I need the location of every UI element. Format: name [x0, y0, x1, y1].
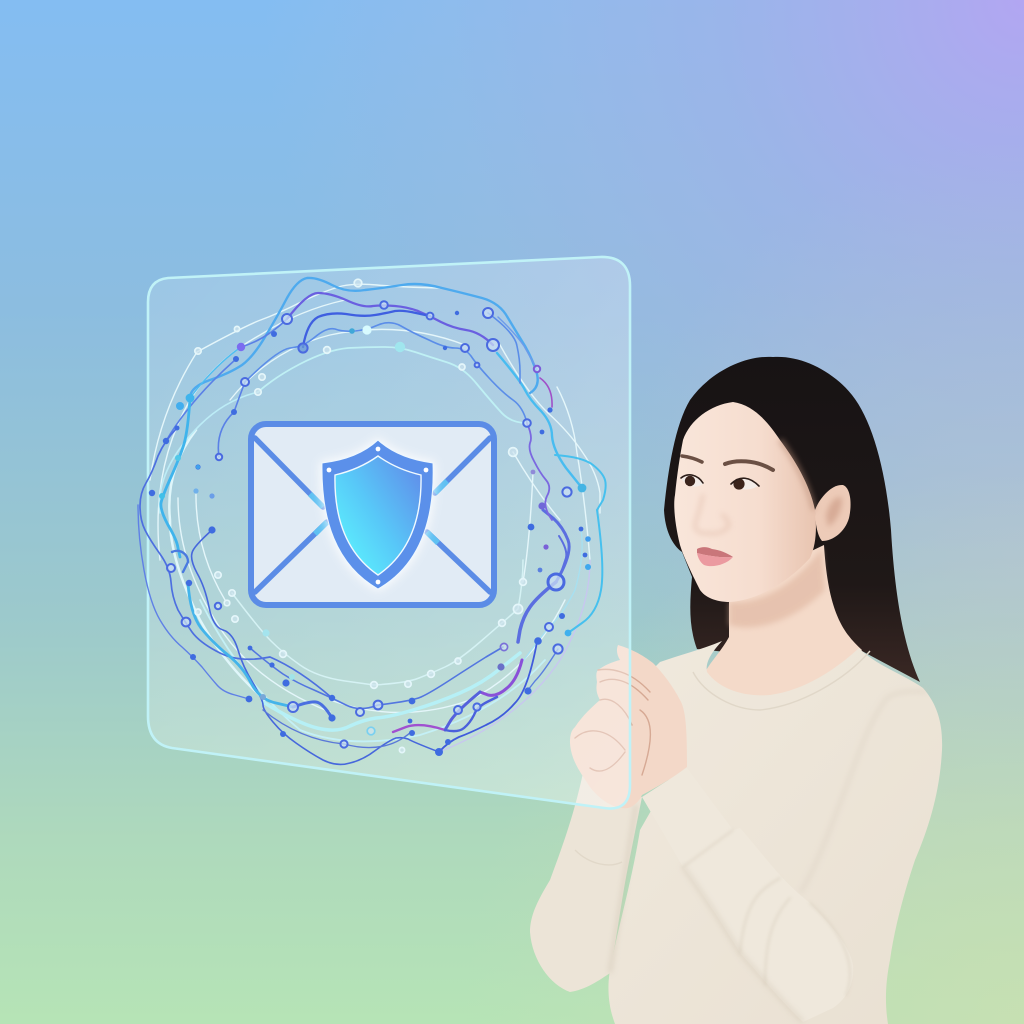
neck [705, 545, 862, 705]
envelope icon [251, 424, 494, 605]
sweater body [608, 641, 942, 1024]
glass panel [148, 257, 630, 809]
left sleeve [530, 773, 642, 992]
envelope flap lines [255, 438, 490, 592]
pale ring nodes [195, 279, 526, 753]
back hair [664, 357, 920, 682]
left outer strand [138, 505, 249, 699]
left cyan strands [161, 398, 190, 557]
left dark strand [140, 428, 332, 698]
sleeve to body shadow [610, 805, 636, 973]
left sleeve cuff ribbing [575, 850, 622, 865]
cyan tints near the shield [310, 481, 447, 543]
bottom dark arc [192, 530, 439, 764]
eyebrows, eyes, nose and lips [681, 456, 773, 566]
right forearm [642, 768, 853, 1022]
pale white strands [150, 284, 600, 712]
ring arc beside left node [172, 551, 188, 572]
purple blue strand [287, 293, 493, 345]
forearm cuff and fold lines [683, 830, 850, 995]
dark ring nodes [167, 301, 572, 748]
shield rivets [327, 447, 428, 584]
thick white and pale cyan strands [169, 430, 265, 700]
solid blue nodes [149, 311, 587, 756]
ear inner shadow [826, 497, 842, 527]
upper right blue and purple strands [527, 423, 552, 520]
hand shading and finger lines [575, 669, 650, 775]
neck shadow [729, 548, 825, 627]
network ring of wavy lines and nodes [138, 278, 606, 764]
face [674, 402, 816, 602]
hair shadow beside face [780, 440, 814, 510]
lower left blue strands [293, 702, 332, 718]
thin blue strand [245, 323, 527, 423]
cyan right strands [568, 510, 602, 633]
purple and magenta strands lower right [480, 660, 522, 695]
sweater collar [693, 651, 870, 710]
shield icon [322, 440, 433, 589]
shield inner [335, 456, 421, 575]
ear [815, 485, 851, 541]
cyan and purple nodes [159, 325, 591, 700]
shoulder seam and arm edge shadow [800, 691, 927, 893]
cyan top arc [190, 278, 538, 398]
shield glow [322, 440, 433, 589]
upper left connectors [166, 319, 287, 457]
person: woman looking at the glass panel [530, 357, 942, 1024]
hands holding the panel [570, 645, 687, 808]
right thick blue strands [518, 582, 556, 642]
forearm underside shadow [683, 867, 803, 1022]
shield outer [322, 440, 433, 589]
dark blue strand [303, 311, 430, 347]
